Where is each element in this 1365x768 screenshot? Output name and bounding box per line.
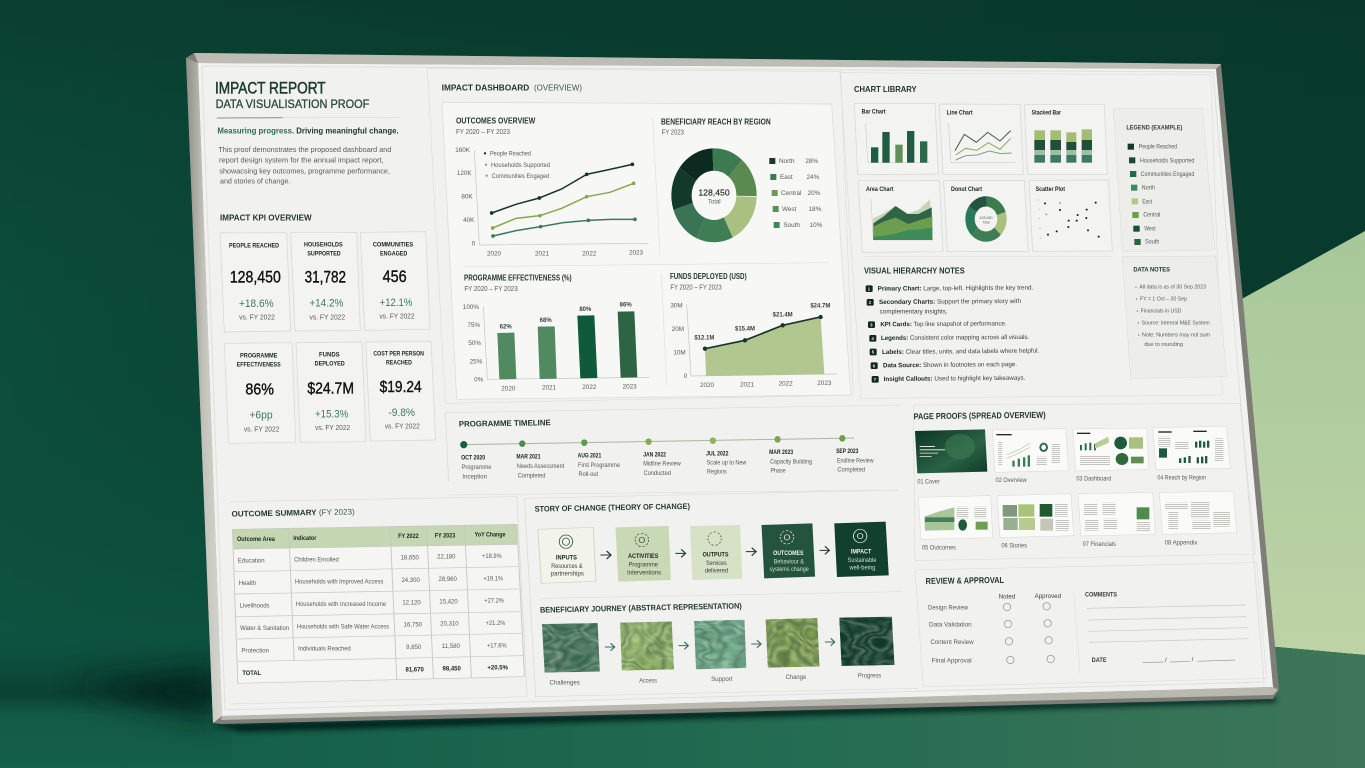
chart: funds deployed area: FUNDS DEPLOYED (USD)	[670, 271, 747, 281]
panel: programme timeline: MAR 2021	[516, 453, 541, 460]
legend panel: LEGEND (EXAMPLE)	[1126, 124, 1182, 131]
chart: programme effectiveness bars	[463, 273, 649, 392]
KPI card: funds deployed: DEPLOYED	[315, 361, 345, 368]
panel: programme timeline: AUG 2021	[578, 452, 601, 459]
panel: outcome summary table: +19.1%	[483, 574, 503, 582]
panel: outcome summary table: 20,310	[440, 620, 459, 627]
chart: programme effectiveness bars: 68%	[540, 318, 552, 324]
visual hierarchy notes: 4	[871, 336, 874, 341]
chart: funds deployed area: $12.1M	[694, 335, 714, 341]
chart: outcomes overview: 2022	[582, 250, 597, 257]
journey image: progress	[839, 617, 895, 666]
panel: outcome summary table	[230, 497, 527, 704]
thumbnail: cover	[915, 429, 987, 473]
panel: outcome summary table: TOTAL	[242, 669, 262, 677]
arrow	[678, 642, 688, 649]
panel: outcome summary table: 15,420	[439, 597, 458, 605]
heading: KPI overview: IMPACT KPI OVERVIEW	[220, 213, 312, 223]
flow box: inputs: Resources &	[551, 563, 583, 570]
chart: outcomes overview: 2023	[629, 250, 644, 257]
visual hierarchy notes: 1	[868, 286, 871, 291]
intro paragraph: This proof demonstrates the proposed dashboard and	[218, 145, 391, 154]
KPI card: funds deployed: FUNDS	[319, 352, 340, 359]
panel: programme timeline: Programme	[462, 463, 491, 471]
KPI card: funds deployed: vs. FY 2022	[315, 423, 350, 432]
title	[215, 79, 369, 111]
chart: programme effectiveness bars: 2020	[501, 385, 516, 392]
visual hierarchy notes: Primary Chart: Large, top-left. Highlights the key trend.	[878, 285, 1034, 293]
KPI card: cost per person reached: vs. FY 2022	[385, 422, 420, 431]
flow box: outcomes	[762, 523, 815, 578]
visual hierarchy notes: 2	[869, 300, 872, 305]
beneficiary journey: BENEFICIARY JOURNEY (ABSTRACT REPRESENTATION)	[540, 602, 742, 615]
journey image: support	[694, 620, 746, 669]
panel: programme timeline: Endline Review	[837, 456, 874, 464]
panel: outcome summary table: 24,300	[401, 576, 420, 584]
data notes panel: FY = 1 Oct – 30 Sep	[1140, 297, 1187, 303]
panel: outcome summary table: FY 2023	[435, 531, 455, 539]
legend panel: Communities Engaged	[1141, 172, 1194, 178]
chart: beneficiary reach by region donut: Central	[781, 190, 801, 197]
panel: programme timeline: Midline Review	[643, 460, 681, 467]
beneficiary journey	[540, 602, 895, 686]
panel: programme timeline: MAR 2023	[769, 448, 793, 456]
panel: review and approval: /	[1165, 658, 1167, 664]
KPI card: funds deployed	[296, 342, 366, 442]
data notes panel: Note: Numbers may not sum	[1142, 333, 1210, 339]
proof captions: 07 Financials	[1083, 541, 1116, 548]
panel: programme timeline: Capacity Building	[770, 457, 812, 465]
panel: review and approval: COMMENTS	[1085, 593, 1117, 599]
panel: programme timeline: Completed	[518, 471, 545, 479]
proof captions: 05 Outcomes	[922, 544, 956, 551]
mini chart: line	[939, 104, 1023, 174]
thumbnail: dashboard	[1073, 428, 1149, 471]
chart: programme effectiveness bars: 25%	[470, 358, 483, 365]
flow box: inputs: partnerships	[551, 571, 584, 577]
KPI card: cost per person reached: -9.8%	[388, 407, 415, 419]
display board frame	[186, 53, 1279, 724]
flow box: activities: Interventions	[627, 569, 661, 576]
chart: funds deployed area: $15.4M	[735, 327, 755, 333]
data notes panel	[1122, 256, 1227, 378]
panel: story of change: STORY OF CHANGE (THEORY OF CHANGE)	[535, 502, 690, 514]
panel: outcome summary table: 28,960	[439, 575, 457, 583]
chart: outcomes overview: FY 2020 – FY 2023	[456, 129, 510, 136]
KPI card: communities engaged: vs. FY 2022	[379, 311, 414, 320]
mini chart: scatter plot: Scatter Plot	[1036, 187, 1065, 193]
panel: outcome summary table: +20.5%	[487, 663, 508, 671]
chart: outcomes overview: People Reached	[490, 151, 531, 158]
KPI card: communities engaged: +12.1%	[380, 297, 413, 309]
flow box: outputs	[690, 525, 742, 580]
proof captions: 08 Appendix	[1165, 539, 1198, 546]
panel: outcome summary table: 81,670	[405, 665, 424, 673]
mini chart: stacked bar: Stacked Bar	[1032, 111, 1062, 117]
KPI card: programme effectiveness: 86%	[245, 381, 274, 398]
KPI card: communities engaged: 456	[383, 267, 407, 286]
flow box: impact	[834, 522, 889, 577]
flow box: outcomes: Behaviour &	[774, 558, 804, 565]
arrow	[751, 640, 761, 648]
panel: outcome summary table: Households with Safe Water Access	[297, 622, 389, 630]
panel: review and approval: Content Review	[930, 639, 974, 646]
dashboard heading: IMPACT DASHBOARD	[442, 82, 529, 92]
chart: programme effectiveness bars: 75%	[467, 322, 480, 329]
panel: impact dashboard	[427, 68, 853, 403]
panel: review and approval: Final Approval	[932, 657, 972, 664]
panel: programme timeline: JAN 2022	[643, 450, 666, 458]
chart: outcomes overview: 120K	[457, 170, 472, 177]
panel: report title and KPI overview	[215, 79, 436, 443]
KPI card: households supported: +14.2%	[309, 298, 344, 310]
proof captions	[917, 474, 1206, 551]
proof captions: 03 Dashboard	[1076, 476, 1112, 483]
KPI card: people reached	[220, 233, 291, 332]
KPI card: households supported: SUPPORTED	[307, 251, 341, 258]
panel: review and approval: /	[1192, 657, 1194, 663]
chart: programme effectiveness bars: FY 2020 – FY 2023	[464, 286, 518, 293]
KPI card: programme effectiveness: +6pp	[249, 410, 273, 422]
chart: programme effectiveness bars: 80%	[579, 307, 592, 313]
intro paragraph: report design system for the annual impact report,	[219, 156, 384, 165]
mini chart: donut: Total	[982, 221, 990, 225]
visual hierarchy notes: Labels: Clear titles, units, and data labels where helpful.	[882, 348, 1040, 356]
legend panel	[1113, 108, 1215, 252]
panel: outcome summary table: 9,850	[406, 643, 421, 651]
mini chart: line: Line Chart	[947, 110, 973, 116]
journey image: access	[620, 621, 674, 671]
visual hierarchy notes: 7	[874, 377, 877, 382]
KPI card: programme effectiveness: PROGRAMME	[240, 352, 277, 359]
tagline: Measuring progress. Driving meaningful change.	[217, 126, 399, 136]
chart: funds deployed area: $24.7M	[810, 304, 830, 310]
chart: beneficiary reach by region donut: North	[779, 158, 795, 165]
visual hierarchy notes: VISUAL HIERARCHY NOTES	[864, 265, 965, 275]
chart: beneficiary reach by region donut: BENEFICIARY REACH BY REGION	[661, 117, 771, 127]
KPI card: funds deployed: $24.7M	[307, 380, 354, 397]
visual hierarchy notes: Secondary Charts: Support the primary story with	[879, 298, 1021, 306]
beneficiary journey: Support	[711, 675, 733, 683]
chart: programme effectiveness bars: 100%	[463, 304, 479, 311]
panel: outcome summary table: FY 2022	[398, 532, 419, 540]
mini chart: scatter plot	[1029, 180, 1112, 251]
panel: outcome summary table: +18.9%	[482, 552, 502, 560]
KPI card: communities engaged: COMMUNITIES	[373, 242, 413, 249]
flow box: impact: Sustainable	[848, 557, 876, 564]
intro paragraph: and stories of change.	[220, 177, 290, 186]
thumbnail: financials	[1078, 492, 1155, 536]
KPI card: people reached: +18.6%	[239, 298, 274, 310]
flow box: activities: Programme	[628, 562, 658, 568]
panel: outcome summary table: 12,120	[402, 598, 421, 606]
proof captions: 04 Reach by Region	[1157, 474, 1206, 481]
panel: outcome summary table: Water & Sanitation	[240, 624, 289, 632]
chart: funds deployed area: FY 2020 – FY 2023	[670, 284, 722, 291]
thumbnail: overview	[992, 429, 1068, 472]
legend panel: North	[1142, 186, 1155, 192]
chart: outcomes overview: 2020	[487, 251, 502, 258]
data notes panel: DATA NOTES	[1133, 267, 1170, 274]
panel: programme timeline: First Programme	[578, 461, 620, 469]
panel: review and approval: REVIEW & APPROVAL	[926, 575, 1005, 586]
legend panel: South	[1145, 240, 1159, 246]
panel: page proofs: PAGE PROOFS (SPREAD OVERVIEW)	[914, 410, 1046, 421]
chart: beneficiary reach by region donut: 128,450	[698, 187, 730, 197]
mini chart: donut: 128,450	[979, 216, 993, 220]
arrow	[825, 638, 835, 646]
panel: outcome summary table: Children Enrolled	[294, 555, 339, 563]
KPI card: people reached: 128,450	[230, 268, 281, 287]
panel: outcome summary table: Individuals Reached	[298, 645, 351, 652]
panel: outcome summary table: 22,180	[437, 553, 455, 560]
legend panel: East	[1142, 199, 1152, 205]
KPI card: people reached: PEOPLE REACHED	[229, 242, 279, 249]
panel: programme timeline: Roll-out	[578, 470, 598, 478]
beneficiary journey: Access	[639, 677, 657, 684]
panel: outcome summary table: 98,450	[443, 664, 461, 672]
chart: outcomes overview: 80K	[461, 193, 473, 200]
panel: programme timeline: Conducted	[644, 469, 671, 477]
chart: outcomes overview: 160K	[455, 147, 471, 154]
chart: outcomes overview: Communities Engaged	[492, 173, 550, 180]
panel: page proofs and review	[913, 403, 1267, 687]
chart: programme effectiveness bars: 2021	[542, 385, 557, 392]
KPI card: programme effectiveness: vs. FY 2022	[244, 424, 279, 433]
panel: programme timeline: Scale up to New	[707, 459, 747, 466]
panel: outcome summary table: YoY Change	[475, 531, 505, 538]
panel: programme timeline: Regions	[707, 468, 727, 475]
KPI card: households supported: HOUSEHOLDS	[304, 242, 343, 249]
chart: programme effectiveness bars: 2022	[582, 384, 597, 391]
panel: review and approval	[915, 563, 1267, 687]
arrow	[820, 546, 829, 554]
KPI card: communities engaged	[360, 232, 430, 330]
data notes panel: All data is as of 30 Sep 2023	[1139, 285, 1206, 291]
visual hierarchy notes: Legends: Consistent color mapping across all visuals.	[881, 334, 1030, 342]
KPI card: cost per person reached: $19.24	[380, 379, 422, 396]
KPI card: households supported: 31,782	[305, 267, 346, 286]
chart: funds deployed area	[670, 271, 837, 389]
thumbnail: appendix	[1159, 491, 1237, 534]
legend panel: West	[1144, 226, 1156, 232]
visual hierarchy notes: 3	[870, 322, 873, 327]
dashboard heading: (OVERVIEW)	[534, 82, 582, 92]
arrow	[605, 643, 615, 651]
chart: funds deployed area: 2022	[779, 381, 793, 388]
panel: programme timeline: Phase	[770, 466, 786, 474]
chart: funds deployed area: 2021	[740, 381, 755, 388]
visual hierarchy notes: Data Source: Shown in footnotes on each page.	[883, 361, 1017, 369]
panel: programme timeline: PROGRAMME TIMELINE	[459, 418, 551, 429]
KPI card: cost per person reached: REACHED	[386, 360, 412, 367]
visual hierarchy notes	[864, 265, 1040, 383]
proof captions: 01 Cover	[917, 478, 940, 485]
chart: beneficiary reach by region donut: FY 2023	[662, 130, 684, 137]
panel: outcome summary table: 18,650	[401, 553, 419, 561]
flow box: activities: ACTIVITIES	[628, 553, 659, 560]
visual hierarchy notes: 6	[873, 363, 876, 368]
chart: programme effectiveness bars: 2023	[623, 383, 637, 390]
flow box: activities	[616, 526, 671, 582]
flow box: outputs: delivered	[705, 568, 728, 574]
panel: outcome summary table: 16,750	[404, 621, 422, 628]
chart: programme effectiveness bars: 86%	[620, 303, 632, 309]
chart: beneficiary reach by region donut: West	[782, 206, 797, 213]
chart library heading: CHART LIBRARY	[854, 84, 917, 94]
visual hierarchy notes: complementary insights.	[880, 309, 948, 316]
legend panel: Central	[1143, 213, 1160, 219]
panel: review and approval: Design Review	[928, 604, 969, 611]
arrow	[675, 549, 686, 557]
beneficiary journey: Change	[786, 673, 806, 681]
panel: outcome summary table: OUTCOME SUMMARY (FY 2023)	[231, 508, 355, 519]
KPI card: households supported: vs. FY 2022	[309, 312, 345, 321]
journey image: change	[766, 618, 820, 668]
chart: beneficiary reach by region donut: Total	[708, 199, 721, 205]
KPI card: households supported	[291, 232, 360, 331]
mini chart: donut	[944, 180, 1028, 252]
flow box: inputs	[538, 527, 596, 583]
flow box: impact: well-being	[849, 564, 875, 571]
intro paragraph: showacsing key outcomes, programme performance,	[219, 166, 390, 175]
mini chart: stacked bar	[1024, 105, 1107, 175]
chart: outcomes overview: Households Supported	[491, 162, 550, 169]
lower centre panels: timeline, table, story, journey	[230, 405, 919, 704]
chart: beneficiary reach by region donut: 24%	[807, 174, 820, 181]
legend panel: Households Supported	[1140, 158, 1194, 164]
chart: programme effectiveness bars: 62%	[500, 324, 512, 330]
panel: programme timeline: OCT 2020	[461, 454, 485, 461]
panel: review and approval: Data Validation	[929, 622, 972, 629]
thumbnail: stories	[997, 494, 1074, 538]
panel: page proofs	[913, 403, 1256, 561]
chart: outcomes overview	[455, 116, 648, 258]
panel: outcome summary table: +27.2%	[484, 597, 504, 604]
panel: story of change	[524, 490, 919, 697]
chart: outcomes overview: 2021	[535, 250, 550, 257]
panel: outcome summary table: Households with Improved Access	[295, 578, 384, 585]
panel: outcome summary table: Education	[238, 557, 265, 564]
legend panel: People Reached	[1139, 145, 1177, 151]
panel: review and approval: Approved	[1035, 593, 1062, 600]
chart: programme effectiveness bars: 0%	[474, 376, 484, 383]
flow box: impact: IMPACT	[851, 548, 872, 555]
chart: funds deployed area: $21.4M	[773, 312, 793, 318]
panel: outcome summary table: Protection	[241, 646, 269, 654]
chart: outcomes overview: OUTCOMES OVERVIEW	[456, 116, 535, 126]
visual hierarchy notes: Insight Callouts: Used to highlight key takeaways.	[884, 375, 1026, 383]
arrow	[600, 551, 611, 559]
KPI card: programme effectiveness: EFFECTIVENESS	[237, 361, 281, 368]
data notes panel: due to rounding	[1144, 342, 1183, 348]
flow box: outputs: Services	[706, 560, 727, 567]
chart: funds deployed area: 2023	[817, 380, 832, 387]
KPI card: people reached: vs. FY 2022	[239, 313, 275, 322]
KPI card: funds deployed: +15.3%	[315, 408, 349, 420]
proof captions: 06 Stories	[1001, 543, 1027, 550]
panel: review and approval: Noted	[999, 594, 1016, 601]
flow box: outcomes: OUTCOMES	[773, 550, 804, 557]
visual hierarchy notes: KPI Cards: Top line snapshot of performance.	[880, 320, 1007, 328]
thumbnail: outcomes	[918, 496, 993, 539]
beneficiary journey: Progress	[858, 671, 881, 679]
chart: outcomes overview: 0	[472, 241, 476, 248]
title: IMPACT REPORT	[215, 79, 326, 97]
panel: outcome summary table: Health	[239, 579, 256, 587]
flow box: outputs: OUTPUTS	[703, 552, 729, 558]
flow box: outcomes: systems change	[770, 566, 809, 573]
chart: programme effectiveness bars: PROGRAMME EFFECTIVENESS (%)	[464, 273, 572, 283]
panel: programme timeline: SEP 2023	[836, 447, 858, 455]
KPI card: cost per person reached: COST PER PERSON	[373, 351, 424, 358]
mini chart: bar	[854, 103, 938, 175]
panel: outcome summary table: +21.2%	[486, 619, 506, 627]
data notes panel: Financials in USD	[1141, 309, 1181, 315]
intro paragraph	[218, 145, 391, 186]
chart: funds deployed area: 10M	[673, 349, 686, 356]
panel: programme timeline	[445, 405, 901, 495]
chart: outcomes overview: 40K	[463, 217, 475, 224]
mini chart: donut: Donut Chart	[951, 187, 982, 193]
chart: beneficiary reach by region donut: 10%	[810, 222, 823, 229]
chart: funds deployed area: 30M	[670, 303, 683, 310]
panel: chart library and notes	[840, 73, 1227, 398]
arrow	[746, 548, 756, 556]
panel: review and approval: DATE	[1092, 658, 1107, 664]
visual hierarchy notes: 5	[872, 350, 875, 355]
journey image: challenges	[542, 623, 600, 673]
panel: outcome summary table: +17.6%	[487, 641, 507, 649]
panel: outcome summary table: Indicator	[293, 534, 317, 542]
chart: beneficiary reach by region donut: 28%	[805, 158, 818, 165]
chart: beneficiary reach by region donut: South	[783, 222, 800, 229]
chart: beneficiary reach by region donut: East	[780, 174, 793, 181]
mini chart: area: Area Chart	[866, 187, 893, 193]
chart: beneficiary reach by region donut: 18%	[809, 206, 822, 213]
panel: outcome summary table: Outcome Area	[237, 535, 276, 543]
chart: beneficiary reach by region donut: 20%	[808, 190, 821, 197]
KPI card: programme effectiveness	[224, 343, 296, 443]
thumbnail: reach by region	[1153, 426, 1230, 469]
panel: programme timeline: Needs Assessment	[517, 462, 564, 470]
mini chart: area	[858, 180, 943, 252]
chart: programme effectiveness bars: 50%	[468, 340, 481, 347]
panel: outcome summary table: Households with Increased Income	[296, 600, 386, 608]
panel: programme timeline: Completed	[837, 465, 865, 473]
panel: outcome summary table: 11,580	[442, 642, 460, 650]
title: DATA VISUALISATION PROOF	[216, 97, 369, 111]
chart: funds deployed area: 0	[684, 373, 688, 380]
panel: programme timeline: Inception	[462, 472, 487, 480]
chart: beneficiary reach by region donut	[661, 117, 823, 246]
chart: funds deployed area: 2020	[700, 382, 715, 389]
panel: outcome summary table: Livelihoods	[240, 601, 270, 609]
data notes panel: Source: Internal M&E System	[1142, 321, 1210, 327]
flow box: inputs: INPUTS	[556, 554, 577, 561]
KPI card: cost per person reached	[366, 341, 436, 441]
panel: programme timeline: JUL 2022	[706, 449, 728, 457]
mini chart: bar: Bar Chart	[862, 110, 886, 116]
beneficiary journey: Challenges	[549, 678, 580, 686]
chart: funds deployed area: 20M	[672, 326, 684, 333]
KPI card: communities engaged: ENGAGED	[380, 250, 408, 257]
proof captions: 02 Overview	[996, 477, 1027, 484]
